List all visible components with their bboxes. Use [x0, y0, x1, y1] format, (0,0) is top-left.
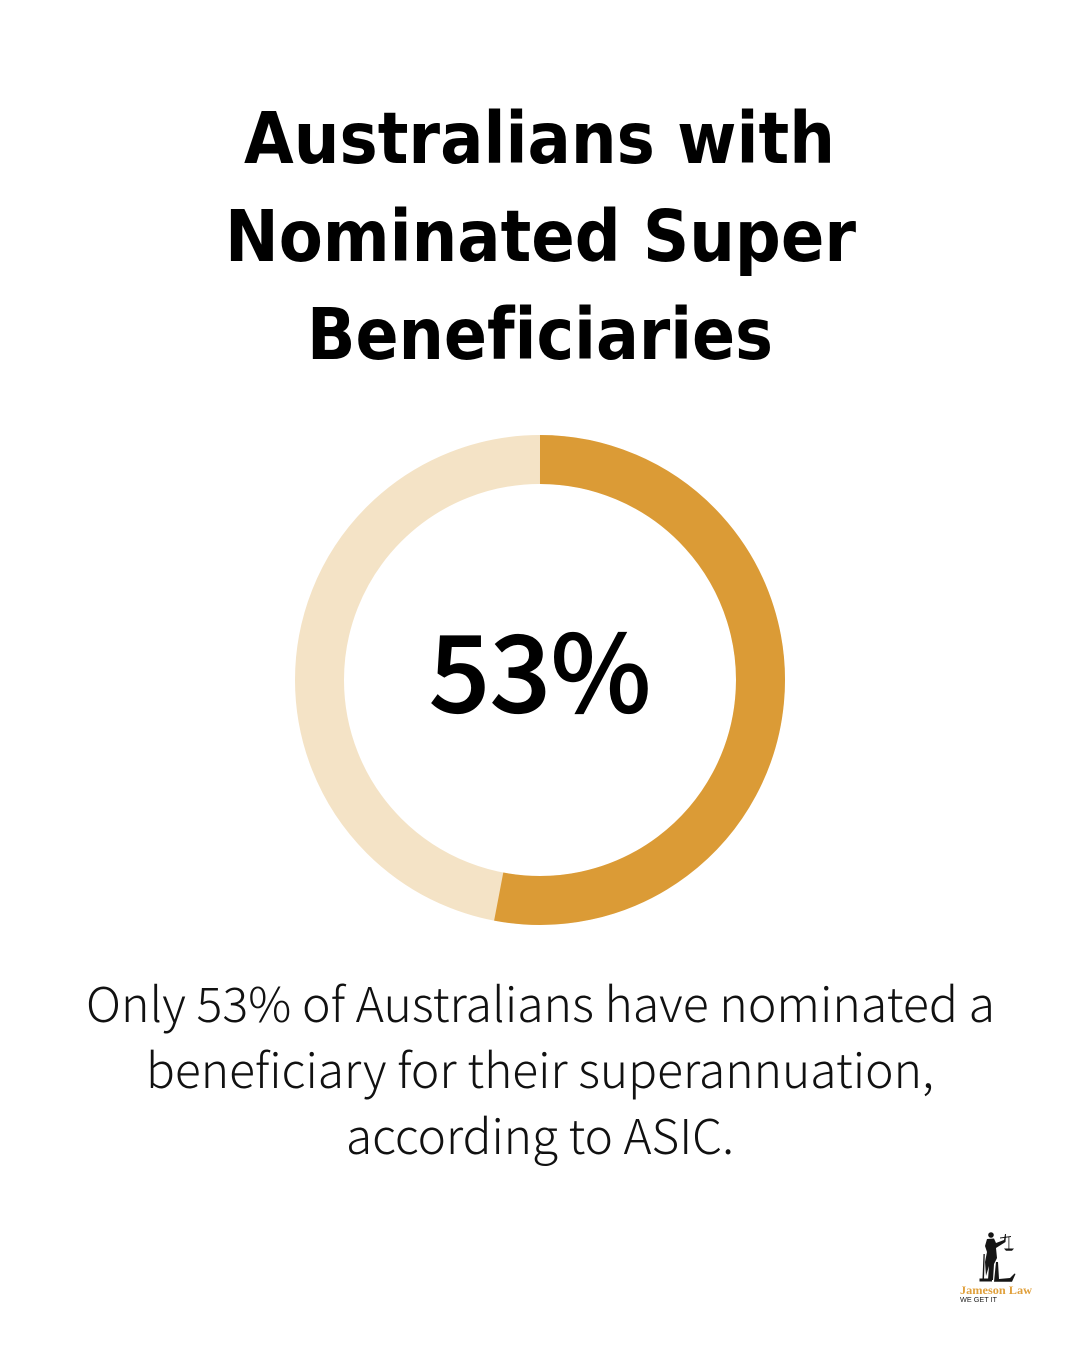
description text: Only 53% of Australians have nominated a: [86, 966, 995, 1036]
center value: 53%: [429, 589, 651, 743]
donut arc: 53%: [499, 460, 760, 900]
donut chart: 53%: [320, 460, 760, 900]
logo: Jameson Law: [960, 1232, 1033, 1304]
title: [225, 97, 856, 376]
donut track: remaining 47%: [320, 460, 760, 900]
icon: lady justice: [980, 1232, 1016, 1282]
logo name: Jameson Law: [960, 1285, 1033, 1297]
description text: beneficiary for their superannuation,: [146, 1032, 934, 1102]
description text: according to ASIC.: [346, 1098, 734, 1168]
title: Nominated Super: [225, 195, 856, 278]
description text: [86, 966, 995, 1168]
title: Beneficiaries: [307, 293, 773, 376]
logo tagline: WE GET IT: [960, 1297, 998, 1304]
title: Australians with: [244, 97, 835, 180]
